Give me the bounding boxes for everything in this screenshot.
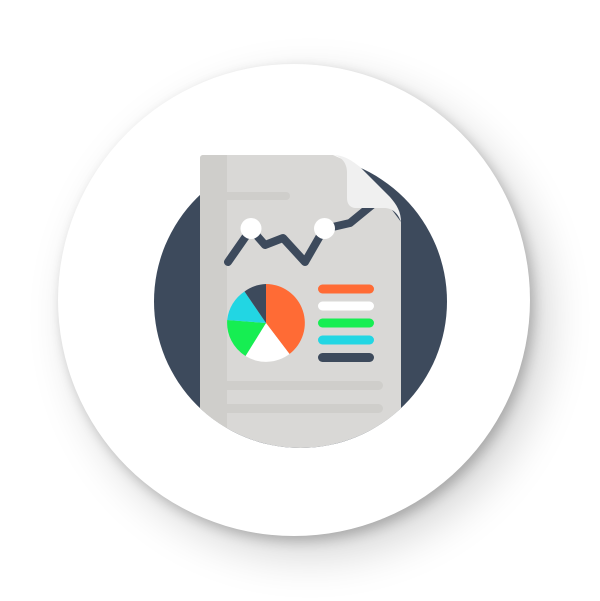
slice cyan	[227, 292, 266, 323]
legend cyan	[318, 336, 374, 344]
document spine band	[200, 155, 227, 428]
chart point 2	[314, 218, 335, 239]
legend orange	[318, 284, 374, 294]
page curl	[333, 155, 401, 222]
line chart	[228, 205, 372, 262]
document sheet	[200, 155, 401, 470]
chart point 1	[240, 218, 262, 239]
dark navy background circle	[154, 155, 447, 448]
legend navy	[318, 353, 374, 362]
slice white	[246, 323, 290, 362]
header text line	[227, 192, 290, 200]
slice green	[227, 320, 266, 356]
report illustration	[154, 155, 447, 448]
legend white	[318, 302, 374, 310]
body text line 2	[227, 404, 383, 413]
white circular badge with drop shadow	[58, 64, 530, 536]
pie chart	[227, 284, 305, 362]
legend green	[318, 318, 374, 328]
slice orange	[266, 284, 305, 354]
legend bars	[318, 284, 374, 362]
slice navy	[244, 284, 266, 323]
body text line 1	[227, 381, 383, 390]
